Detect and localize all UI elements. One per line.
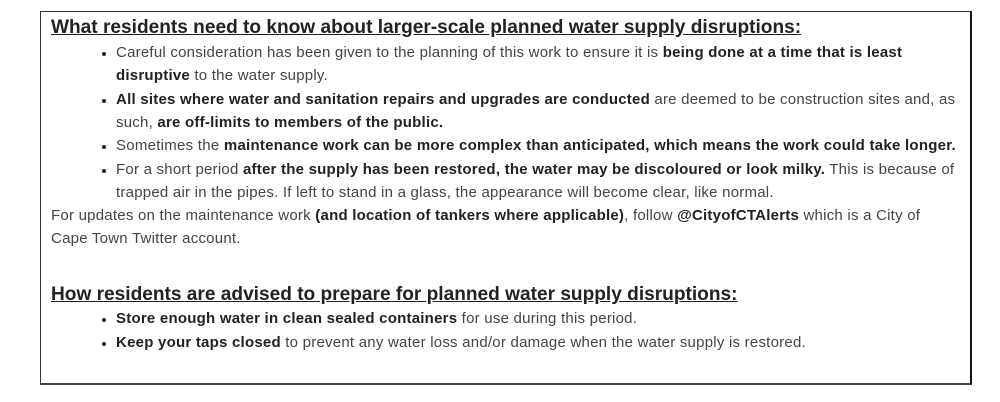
- bullet: construction sites: All sites where water and sanitation repairs and upgrades are conducted are deemed to be construction sites and, as: [116, 91, 955, 108]
- bullet: keep taps closed: Keep your taps closed to prevent any water loss and/or damage when the water supply is restored.: [116, 334, 806, 351]
- text block: updates on Twitter: Cape Town Twitter account.: [51, 230, 241, 247]
- bullet list: how to prepare: [102, 310, 806, 351]
- text block: updates on Twitter: [51, 207, 920, 247]
- heading: how residents are advised to prepare: How residents are advised to prepare for planned water supply disruptions:: [51, 284, 737, 305]
- bullet: careful consideration: [102, 44, 902, 84]
- text block: updates on Twitter: For updates on the maintenance work (and location of tankers where applicable), follow @CityofCTAlerts which is a City of: [51, 207, 920, 224]
- bullet: discoloured water: [102, 161, 954, 201]
- bullet list: what residents need to know: [102, 44, 956, 201]
- bullet: construction sites: [102, 91, 955, 131]
- bullet: store enough water: Store enough water in clean sealed containers for use during this period.: [116, 310, 637, 327]
- bullet: careful consideration: Careful consideration has been given to the planning of this work to ensure it is being done at a time that is least: [116, 44, 902, 61]
- bullet: discoloured water: For a short period after the supply has been restored, the water may be discoloured or look milky. This is because of: [116, 161, 954, 178]
- heading: what residents need to know: What residents need to know about larger-scale planned water supply disruptions:: [51, 17, 801, 38]
- bullet: work could take longer: Sometimes the maintenance work can be more complex than anticipated, which means the work could take longer.: [116, 137, 956, 154]
- bullet: discoloured water: trapped air in the pipes. If left to stand in a glass, the appearance will become clear, like normal.: [116, 184, 774, 201]
- bullet: construction sites: such, are off-limits to members of the public.: [116, 114, 443, 131]
- bullet: careful consideration: disruptive to the water supply.: [116, 67, 328, 84]
